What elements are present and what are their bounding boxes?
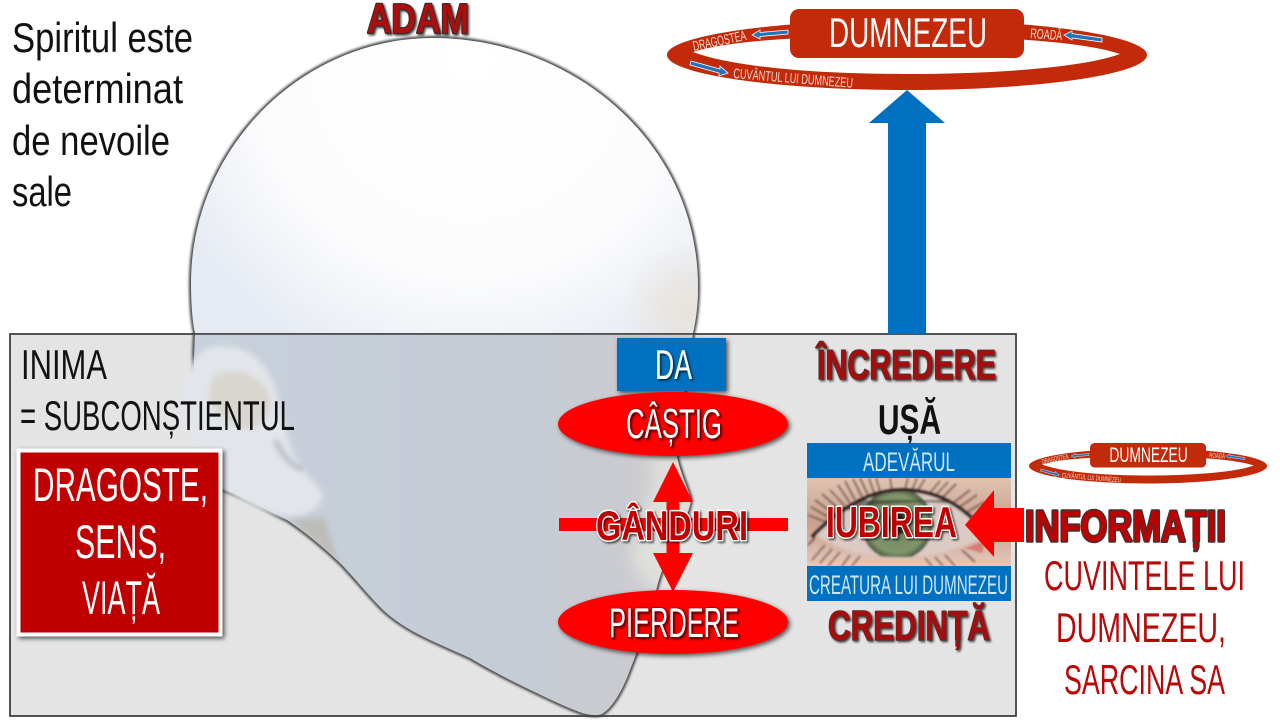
banner: god's creation (807, 566, 1011, 601)
heading: spirit statement (12, 14, 193, 215)
button: DA (617, 338, 726, 391)
box: Dumnezeu (790, 9, 1024, 58)
button: DA: DA (655, 341, 692, 388)
label: information: INFORMAȚII (1025, 502, 1226, 551)
callout: love, meaning, life (18, 450, 220, 634)
diagram: God ring small (1029, 443, 1267, 484)
box: Dumnezeu: DUMNEZEU (829, 9, 987, 56)
banner: god's creation: CREATURA LUI DUMNEZEU (809, 570, 1008, 600)
diagram: God ring small: CUVÂNTUL LUI DUMNEZEU (1062, 470, 1122, 484)
diagram: God ring large: ROADĂ (1030, 25, 1063, 43)
banner: truth: ADEVĂRUL (863, 447, 955, 477)
callout: love, meaning, life: VIAȚĂ (82, 571, 160, 624)
ellipse: gain: CÂȘTIG (626, 400, 722, 447)
image: eye (807, 478, 1011, 566)
diagram: God ring small: ROADĂ (1209, 450, 1226, 461)
text: words of God (1044, 552, 1245, 703)
arrows: thoughts cross (559, 462, 788, 592)
small arrows (690, 30, 1102, 76)
box: Dumnezeu small: DUMNEZEU (1109, 444, 1188, 467)
panel: heart / subconscious (9, 333, 1017, 717)
ellipse: loss: PIERDERE (609, 599, 739, 646)
heading: spirit statement: determinat (12, 65, 183, 112)
label: love: IUBIREA (826, 498, 957, 547)
head silhouette: lower part inside panel (190, 334, 696, 716)
label: trust: ÎNCREDERE (816, 340, 996, 388)
small arrows (1040, 454, 1245, 476)
head silhouette: upper part (191, 38, 710, 715)
arrow: information into eye (965, 490, 1024, 557)
box: Dumnezeu small (1090, 443, 1206, 468)
heading: spirit statement: sale (12, 168, 72, 215)
label: subconscious: = SUBCONȘTIENTUL (20, 392, 295, 439)
heading: spirit statement: Spiritul este (12, 14, 193, 61)
icon: ear (182, 346, 323, 516)
label: INIMA (20, 341, 295, 439)
banner: truth (807, 443, 1011, 478)
diagram: God ring large: CUVÂNTUL LUI DUMNEZEU (733, 65, 854, 91)
panel: eye door (807, 443, 1011, 601)
diagram: God ring large (667, 9, 1147, 91)
diagram: God ring small: DRAGOSTEA (1041, 453, 1069, 466)
callout: love, meaning, life: DRAGOSTE, (33, 458, 208, 511)
label: INIMA: INIMA (21, 341, 107, 388)
label: faith: CREDINȚĂ (828, 602, 990, 650)
callout: love, meaning, life: SENS, (75, 515, 166, 568)
heading: spirit statement: de nevoile (12, 117, 170, 164)
diagram: God ring large: DRAGOSTEA (691, 27, 748, 54)
ellipse: gain (558, 392, 788, 456)
ellipse: loss (558, 590, 788, 654)
arrow: blue upward (869, 90, 945, 334)
label: door: UȘĂ (878, 396, 941, 444)
label: thoughts: GÂNDURI (596, 501, 748, 549)
